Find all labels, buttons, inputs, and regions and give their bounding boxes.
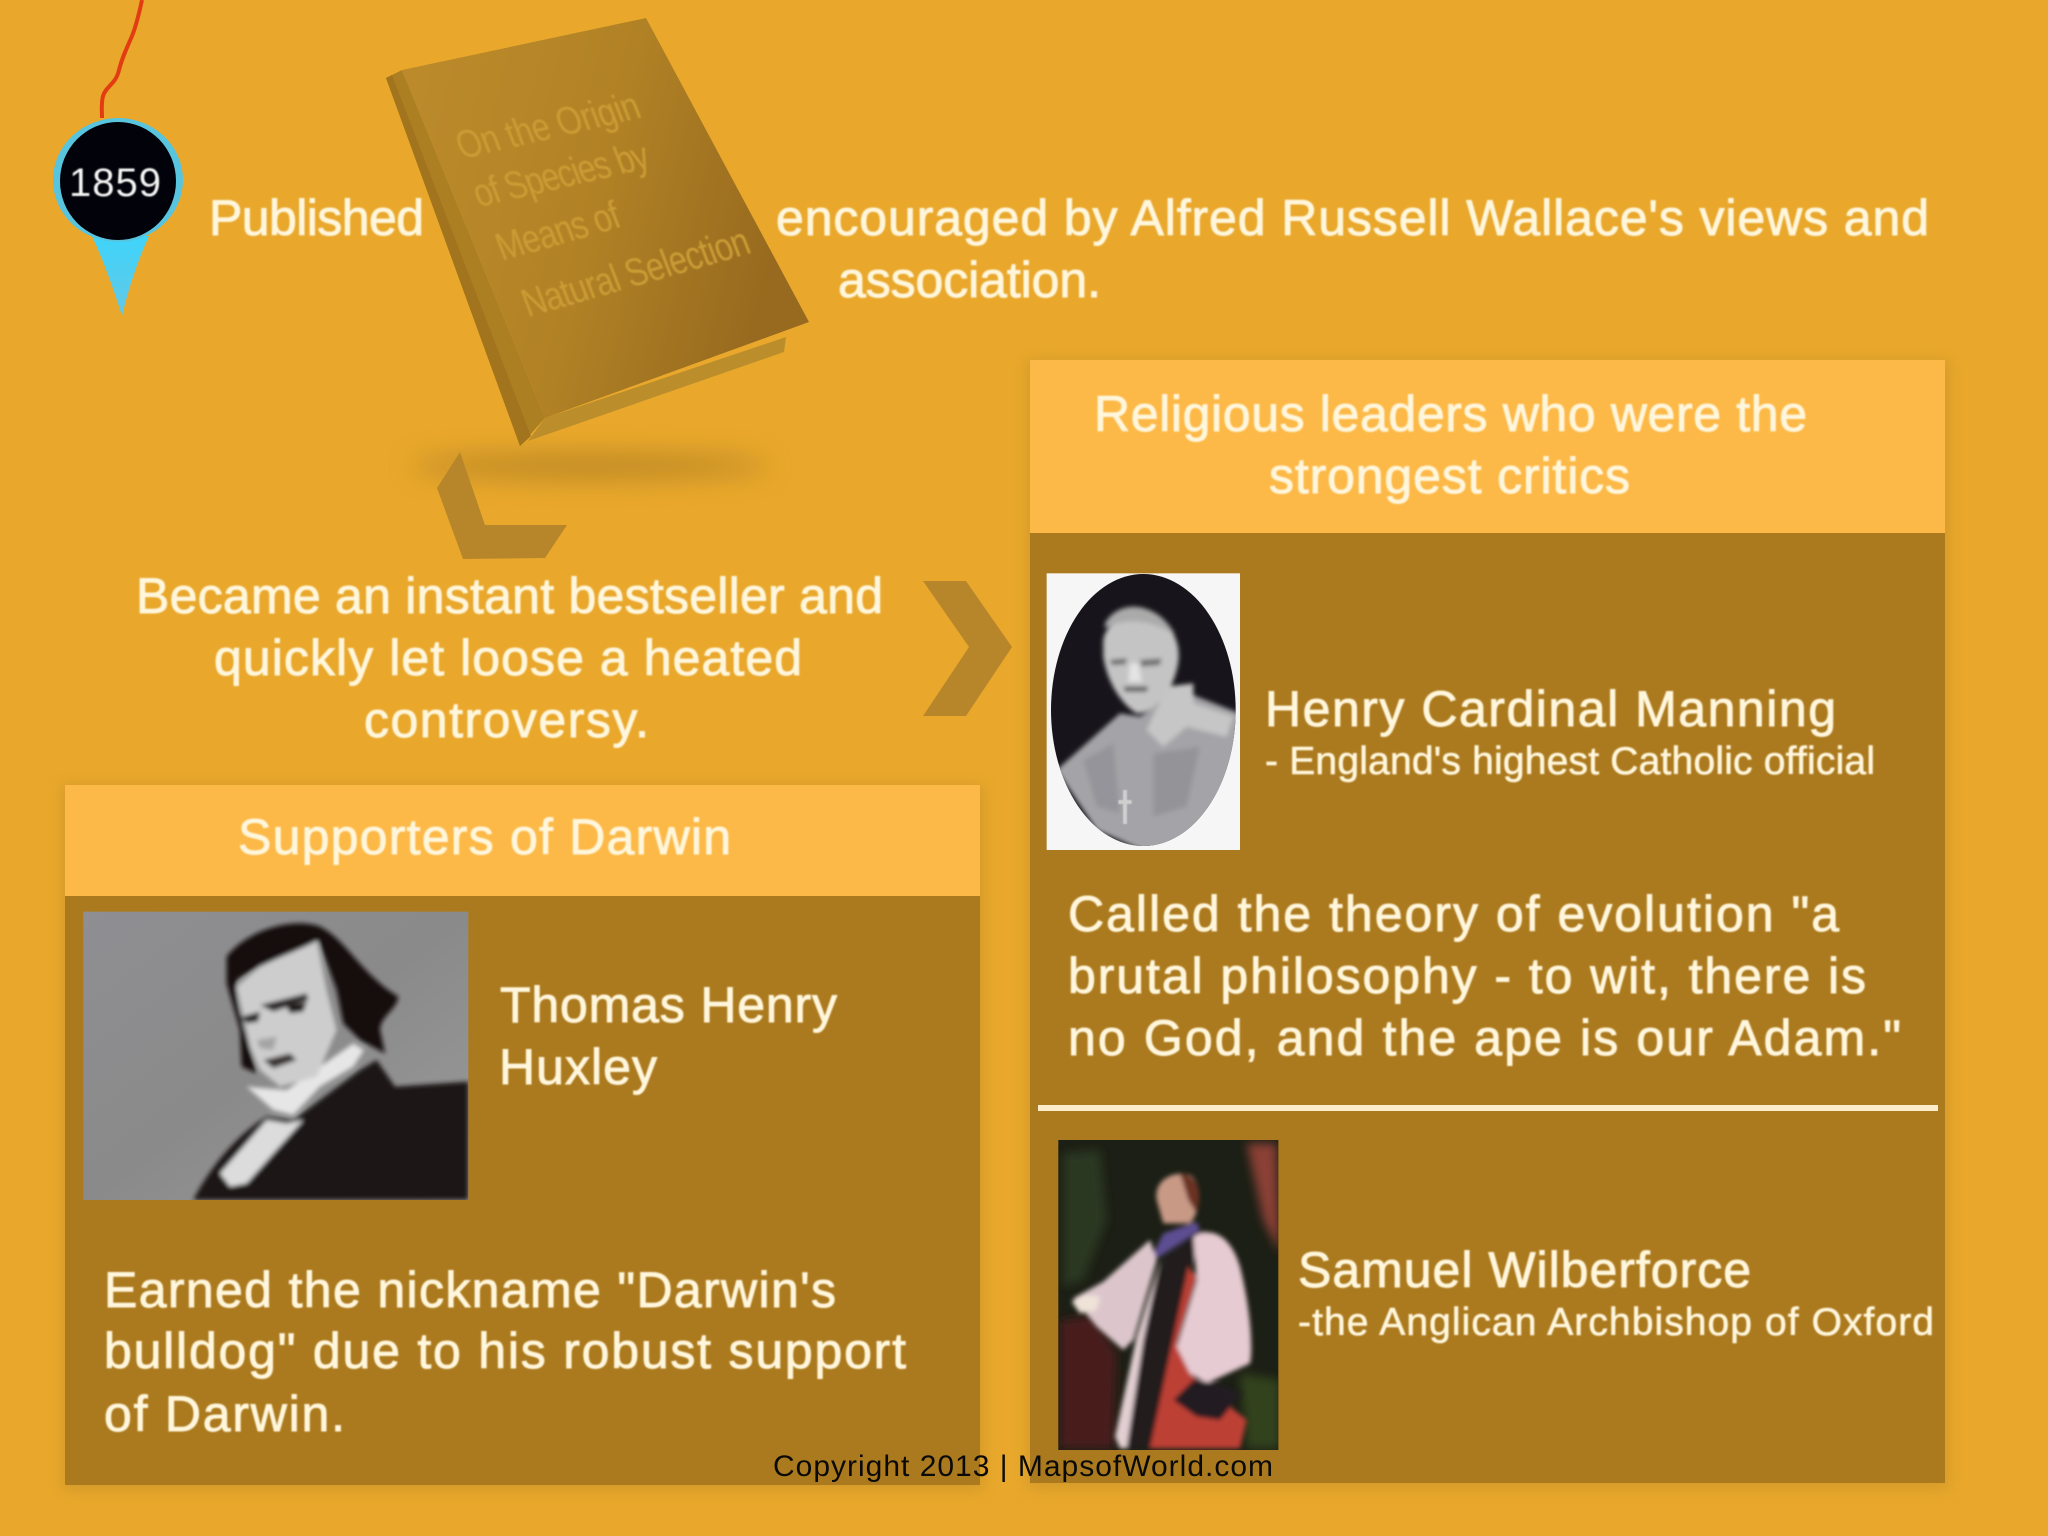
name: Samuel Wilberforce bbox=[1298, 1242, 1934, 1344]
cover bbox=[402, 18, 809, 418]
portrait: Huxley bbox=[83, 912, 468, 1200]
text: instant bestseller: Became an instant bestseller and bbox=[136, 568, 883, 624]
text: instant bestseller: quickly let loose a heated bbox=[214, 630, 802, 686]
name: Henry Cardinal Manning: Henry Cardinal Manning bbox=[1265, 681, 1836, 737]
description: Darwin's bulldog bbox=[104, 1262, 906, 1442]
book title: of Species by bbox=[466, 134, 656, 215]
description: Darwin's bulldog: bulldog" due to his robust support bbox=[104, 1323, 906, 1379]
name: Thomas Henry Huxley: Thomas Henry bbox=[500, 977, 837, 1033]
name: Samuel Wilberforce: Samuel Wilberforce bbox=[1298, 1242, 1751, 1298]
description: Darwin's bulldog: Earned the nickname "Darwin's bbox=[104, 1262, 836, 1318]
panel header bbox=[65, 785, 980, 896]
cyan pin point bbox=[92, 236, 149, 316]
arrow: from book down to bestseller text bbox=[437, 452, 567, 559]
circle bbox=[53, 118, 183, 242]
text: encouraged by Wallace bbox=[776, 190, 1929, 308]
panel shadow bbox=[1027, 360, 1949, 1489]
quote: brutal philosophy: Called the theory of evolution "a bbox=[1068, 886, 1839, 942]
text: encouraged by Wallace: encouraged by Alfred Russell Wallace's views and bbox=[776, 190, 1929, 246]
book shadow bbox=[410, 455, 770, 477]
panel body bbox=[65, 896, 980, 1485]
header text: Religious leaders who were the bbox=[1094, 386, 1807, 442]
description: Darwin's bulldog: of Darwin. bbox=[104, 1386, 345, 1442]
text: instant bestseller bbox=[136, 568, 883, 748]
panel header bbox=[1030, 360, 1945, 533]
panel: religious critics bbox=[1027, 360, 1949, 1489]
book title: Natural Selection bbox=[515, 220, 756, 325]
page block bbox=[528, 337, 786, 441]
arrow: to critics panel bbox=[923, 581, 1012, 716]
portrait: Manning bbox=[1047, 573, 1240, 855]
portrait: Wilberforce bbox=[1058, 1140, 1280, 1450]
quote: brutal philosophy: brutal philosophy - to wit, there is bbox=[1068, 948, 1866, 1004]
header text: strongest critics bbox=[1269, 448, 1630, 504]
header text: Supporters of Darwin bbox=[238, 809, 731, 865]
name: Henry Cardinal Manning: - England's highest Catholic official bbox=[1265, 740, 1875, 783]
quote: brutal philosophy: no God, and the ape is our Adam." bbox=[1068, 1010, 1901, 1066]
icon: book On the Origin of Species bbox=[386, 18, 809, 477]
text: Published: Published bbox=[209, 190, 424, 246]
year: 1859 bbox=[69, 161, 161, 205]
name: Thomas Henry Huxley bbox=[499, 977, 837, 1095]
name: Thomas Henry Huxley: Huxley bbox=[499, 1039, 657, 1095]
book title: On the Origin bbox=[449, 84, 646, 167]
header text bbox=[1094, 386, 1807, 504]
name: Samuel Wilberforce: -the Anglican Archbishop of Oxford bbox=[1298, 1301, 1934, 1344]
book title: Means of bbox=[489, 193, 627, 269]
book title bbox=[449, 84, 756, 325]
text: instant bestseller: controversy. bbox=[364, 692, 649, 748]
panel shadow bbox=[62, 785, 984, 1491]
panel: supporters of Darwin bbox=[62, 785, 984, 1491]
red timeline line bbox=[102, 0, 142, 118]
spine bbox=[386, 70, 545, 446]
text: encouraged by Wallace: association. bbox=[838, 252, 1101, 308]
timeline marker: 1859 bbox=[53, 0, 183, 316]
quote: brutal philosophy bbox=[1068, 886, 1901, 1066]
copyright: Copyright 2013 | MapsofWorld.com bbox=[773, 1450, 1273, 1483]
panel body bbox=[1030, 533, 1945, 1483]
name: Henry Cardinal Manning bbox=[1265, 681, 1875, 783]
